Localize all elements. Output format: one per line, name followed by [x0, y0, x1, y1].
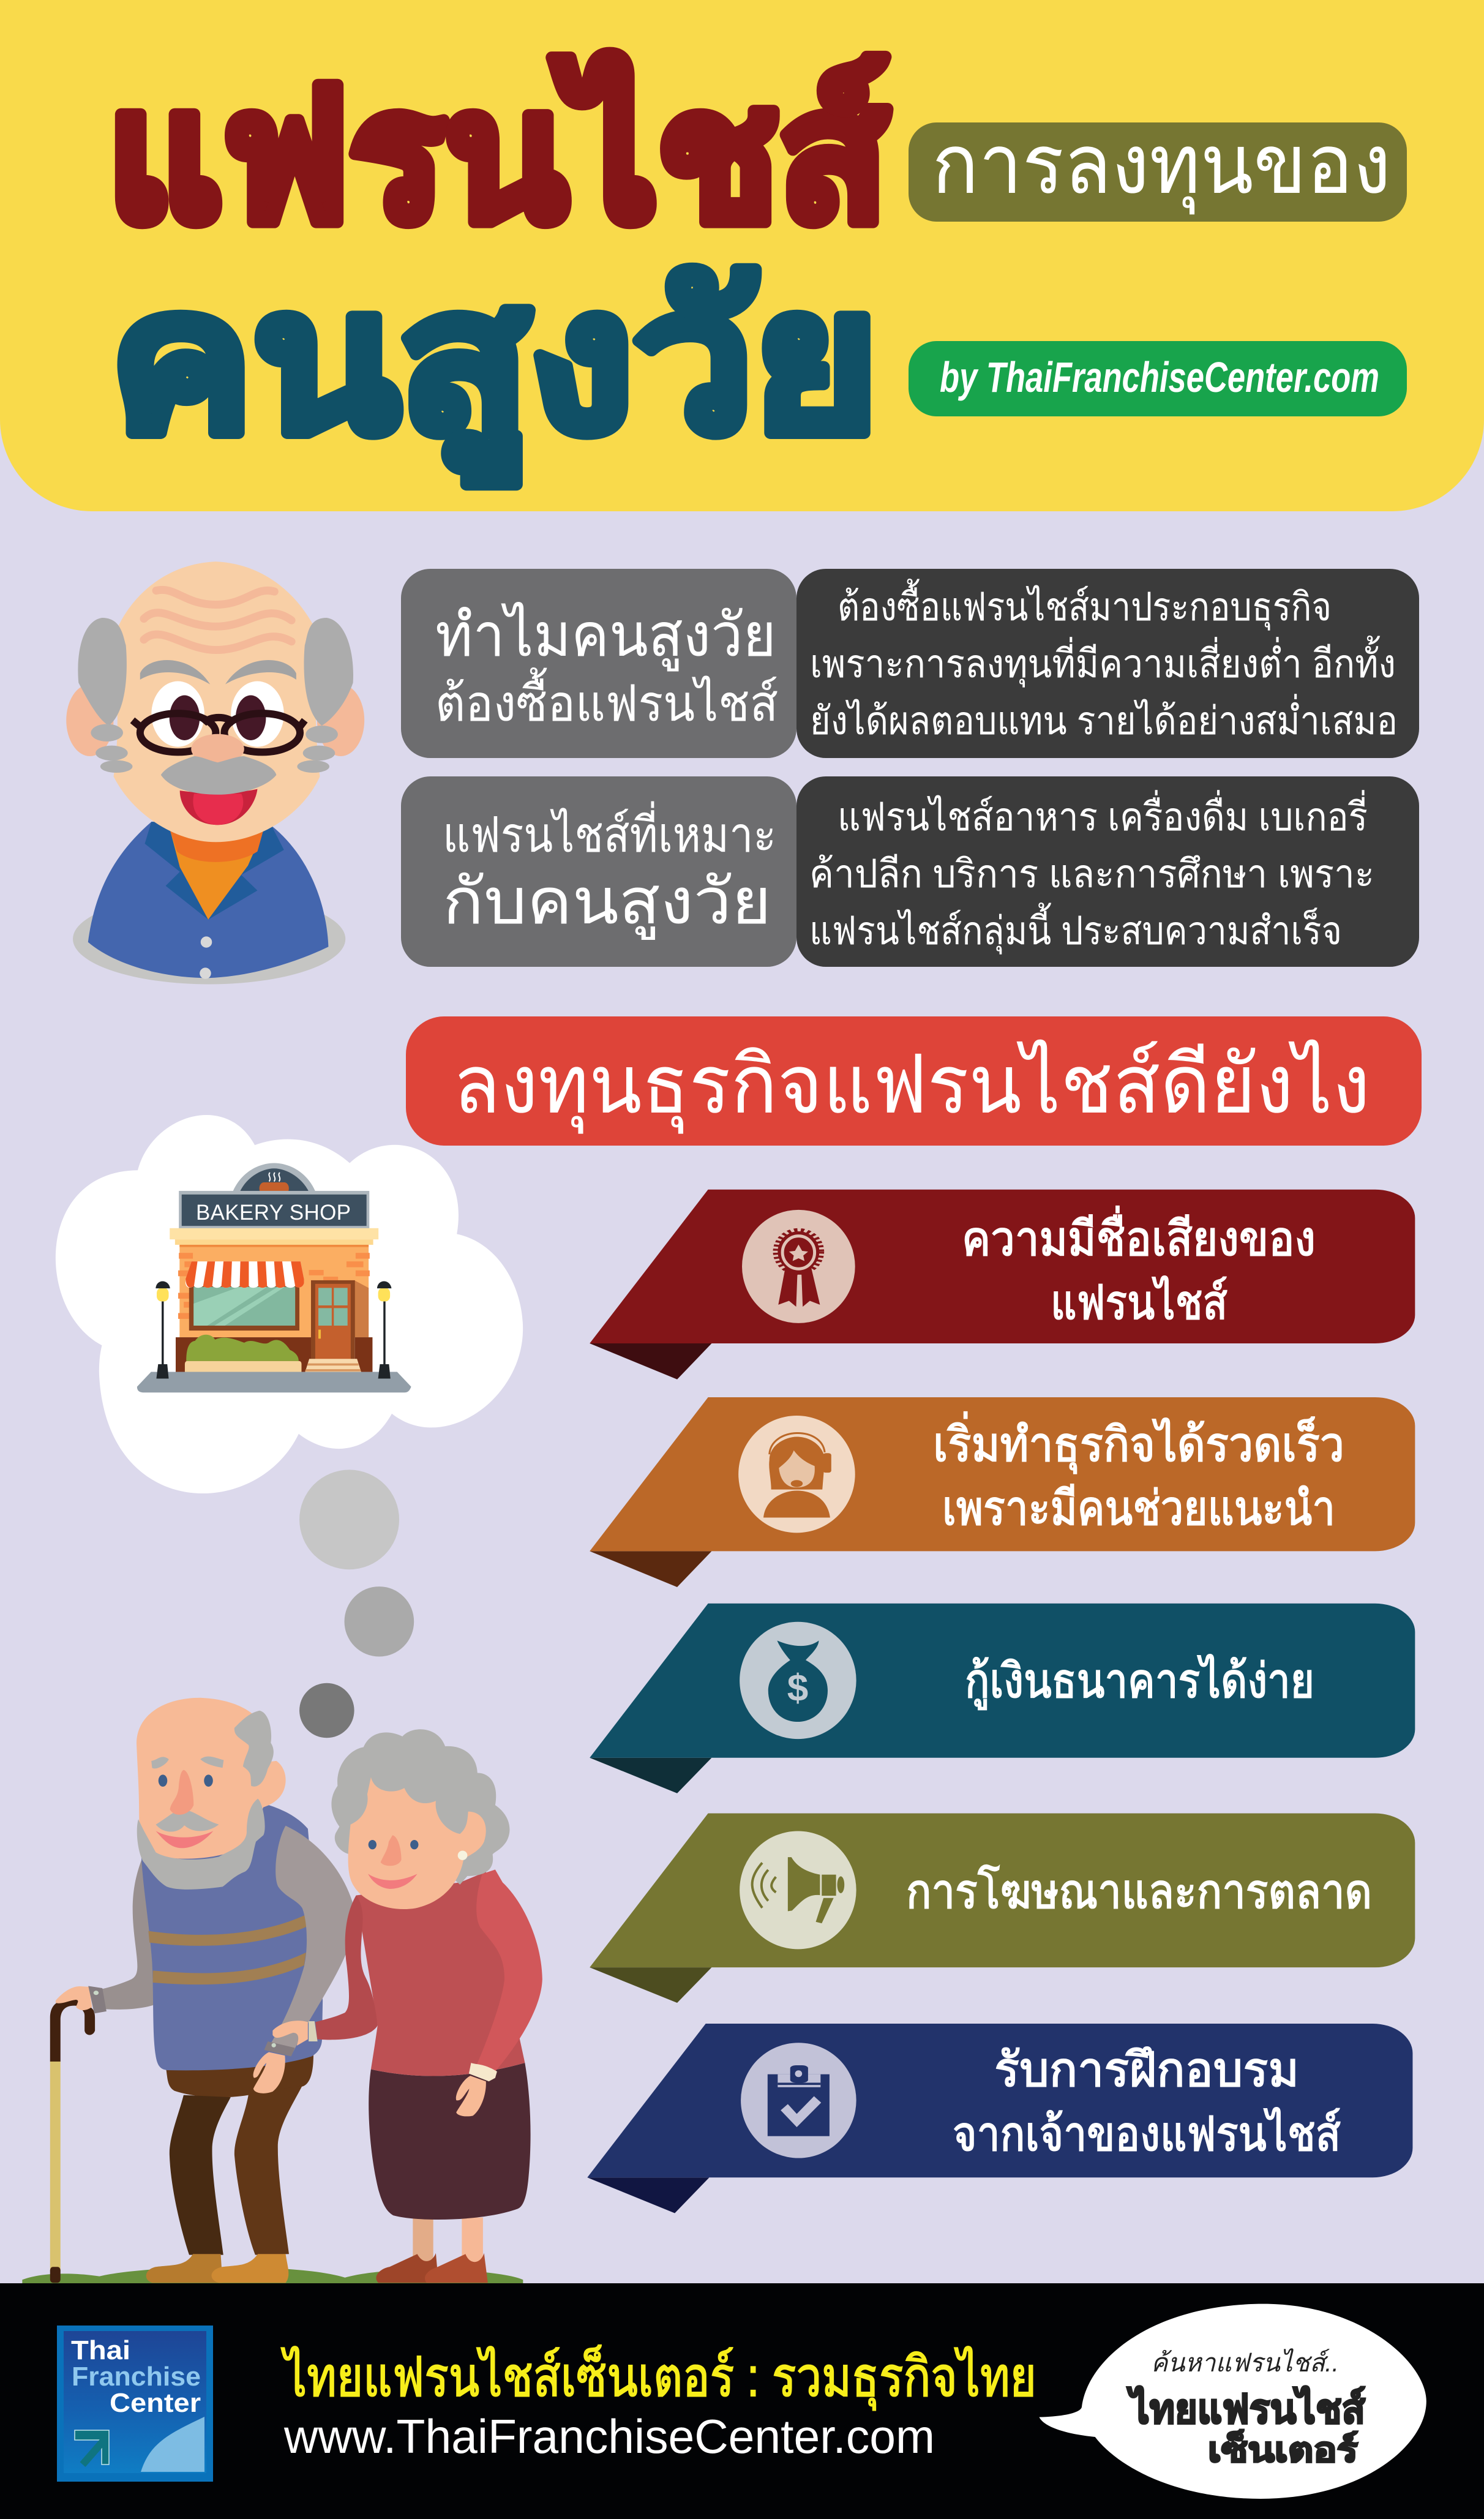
footer bar: [0, 2283, 1484, 2519]
question heading: [435, 601, 778, 732]
ribbon 1: reputation: แฟรนไชส์: [1051, 1275, 1227, 1329]
footer url: www.ThaiFranchiseCenter.com: [283, 2409, 935, 2463]
ribbon 3: bank loans: กู้เงินธนาคารได้ง่าย: [965, 1654, 1314, 1710]
logo: [57, 2326, 213, 2482]
logo: Franchise: [72, 2362, 201, 2392]
answer text: [809, 790, 1374, 955]
question heading: ต้องซื้อแฟรนไชส์: [435, 667, 778, 732]
footer tagline: ไทยแฟรนไชส์เซ็นเตอร์ : รวมธุรกิจไทย: [281, 2344, 1036, 2411]
section heading bar: ลงทุนธุรกิจแฟรนไชส์ดียังไง: [453, 1040, 1370, 1134]
answer text: ต้องซื้อแฟรนไชส์มาประกอบธุรกิจ: [838, 579, 1332, 631]
question heading: ทำไมคนสูงวัย: [435, 601, 776, 672]
ribbon 5: owner training: รับการฝึกอบรม: [994, 2043, 1299, 2097]
answer text: [810, 579, 1398, 743]
question heading: แฟรนไชส์ที่เหมาะ: [443, 802, 776, 862]
ribbon 2: fast start: [590, 1397, 1415, 1587]
thought cloud: [56, 1115, 523, 1493]
answer text: แฟรนไชส์กลุ่มนี้ ประสบความสำเร็จ: [809, 903, 1342, 955]
panel: suitable franchises: [401, 776, 1419, 967]
byline pill: [909, 341, 1407, 416]
ribbon 4: advertising and marketing: การโฆษณาและการตลาด: [906, 1864, 1372, 1918]
answer text: เพราะการลงทุนที่มีความเสี่ยงต่ำ อีกทั้ง: [810, 636, 1396, 688]
subtitle pill: การลงทุนของ: [932, 118, 1391, 215]
ribbon 5: owner training: [587, 2024, 1412, 2213]
question heading: [443, 802, 776, 940]
logo: Thai: [71, 2335, 130, 2365]
ribbon 1: reputation: ความมีชื่อเสียงของ: [962, 1206, 1316, 1266]
ribbon 2: fast start: เริ่มทำธุรกิจได้รวดเร็ว: [933, 1412, 1344, 1474]
icon: bakery shop: BAKERY SHOP: [196, 1201, 351, 1225]
illustration: elderly couple: [22, 1698, 542, 2284]
answer text: ยังได้ผลตอบแทน รายได้อย่างสม่ำเสมอ: [810, 694, 1398, 743]
logo: Center: [110, 2388, 201, 2418]
thought bubbles: [299, 1470, 414, 1738]
ribbon 2: fast start: เพราะมีคนช่วยแนะนำ: [942, 1481, 1335, 1535]
icon: bakery shop: [137, 1163, 411, 1392]
speech bubble: ค้นหาแฟรนไชส์..: [1151, 2348, 1339, 2377]
question heading: กับคนสูงวัย: [443, 866, 771, 940]
ribbon 3: bank loans: $: [787, 1667, 808, 1710]
title line 1: แฟรนไชส์: [107, 51, 888, 258]
ribbon 4: advertising and marketing: [590, 1814, 1415, 2003]
section heading bar: [406, 1016, 1422, 1146]
ribbon 1: reputation: [590, 1190, 1415, 1380]
answer text: แฟรนไชส์อาหาร เครื่องดื่ม เบเกอรี่: [838, 790, 1368, 839]
speech bubble: [1040, 2304, 1426, 2499]
ribbon 5: owner training: จากเจ้าของแฟรนไชส์: [953, 2107, 1341, 2161]
illustration: elderly man portrait: [66, 561, 364, 984]
ribbon 3: bank loans: [590, 1604, 1415, 1793]
panel: why seniors buy a franchise: [401, 569, 1419, 758]
speech bubble: ไทยแฟรนไชส์: [1126, 2386, 1366, 2431]
header panel: [0, 0, 1484, 511]
speech bubble: เซ็นเตอร์: [1208, 2430, 1358, 2469]
answer text: ค้าปลีก บริการ และการศึกษา เพราะ: [809, 852, 1374, 896]
title line 2: คนสูงวัย: [110, 252, 879, 486]
